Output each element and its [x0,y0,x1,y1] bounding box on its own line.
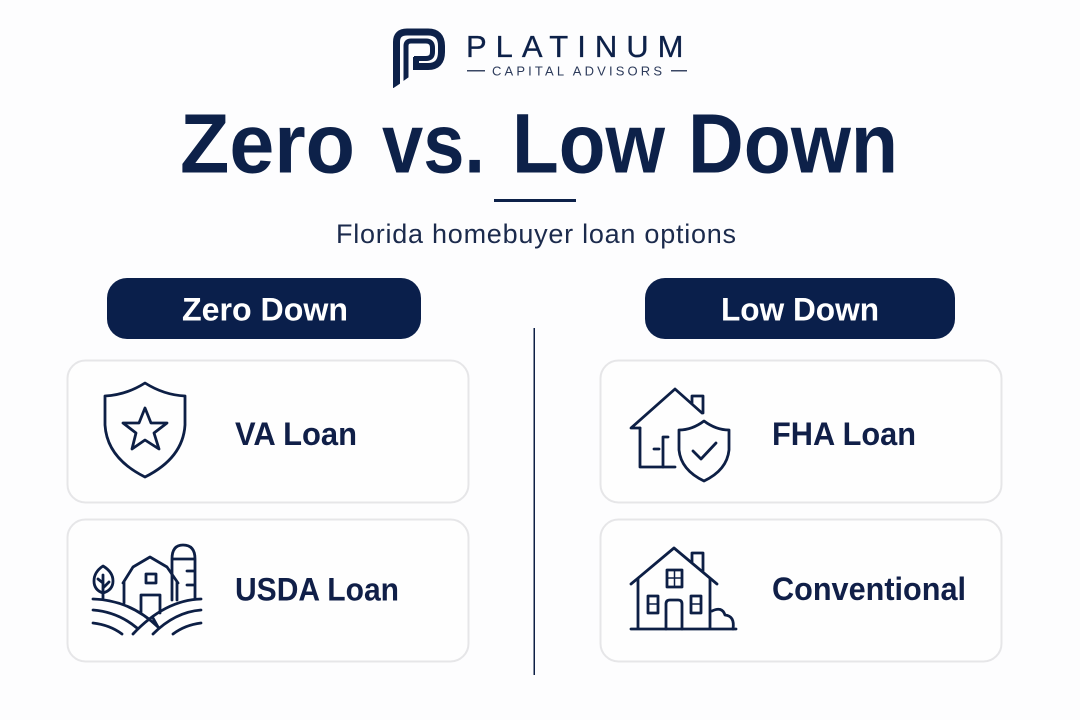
icon: house with chimney and bush [631,548,736,629]
logo tagline: CAPITAL ADVISORS [492,64,662,78]
icon: shield with star [105,383,185,477]
logo: Platinum Capital Advisors [392,29,692,92]
logo wordmark: PLATINUM [466,29,692,64]
title [180,96,898,190]
label: Conventional: Conventional [772,571,966,607]
card: Conventional [600,520,1002,662]
title: Zero [180,96,355,190]
icon: farm with barn and silo [93,545,201,634]
heading pill: Zero Down: Zero Down [182,292,348,328]
panel: Zero Down column [68,278,468,662]
card: USDA Loan [68,520,468,662]
subtitle: Florida homebuyer loan options [336,219,736,249]
label: USDA Loan: USDA Loan [235,572,399,608]
card: VA Loan [68,360,468,502]
label: FHA Loan: FHA Loan [772,416,916,452]
heading pill: Zero Down [107,278,421,339]
heading pill: Low Down [645,278,955,339]
panel: Low Down column [600,278,1002,662]
label: VA Loan: VA Loan [235,416,357,452]
column divider [534,328,535,675]
title: vs. [382,96,485,190]
heading pill: Low Down: Low Down [721,292,879,328]
title: Down [688,96,898,190]
icon: P monogram [392,32,442,92]
title: Low [512,96,666,190]
title underline [494,199,576,202]
icon: house with check shield [631,389,729,481]
card: FHA Loan [600,360,1002,502]
